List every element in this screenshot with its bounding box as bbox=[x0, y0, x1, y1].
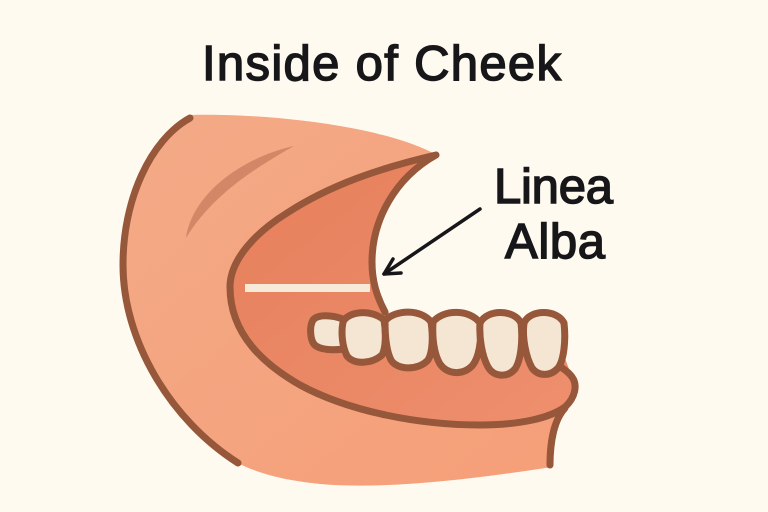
cheek outer skin bbox=[122, 115, 560, 486]
tooth 6 bbox=[523, 312, 565, 374]
tooth 4 bbox=[433, 312, 481, 373]
tooth 2 bbox=[342, 313, 385, 362]
tooth 3 bbox=[385, 312, 432, 368]
label: Linea Alba: Alba bbox=[505, 215, 606, 269]
linea alba white line bbox=[245, 284, 370, 292]
label: Linea Alba bbox=[494, 160, 614, 269]
title: Inside of Cheek bbox=[202, 37, 562, 91]
molar tooth 1 bbox=[311, 316, 344, 350]
inner mouth cavity bbox=[230, 155, 575, 425]
cheek illustration bbox=[122, 115, 575, 486]
arrow pointing to linea alba bbox=[384, 209, 480, 274]
label: Linea Alba: Linea bbox=[494, 160, 614, 214]
jaw lip curve bbox=[550, 408, 565, 465]
inner mouth outline bbox=[230, 155, 575, 425]
teeth bbox=[311, 312, 565, 375]
tooth 5 bbox=[480, 312, 522, 375]
cheek outline bbox=[123, 118, 238, 463]
cheek crease bbox=[186, 146, 294, 238]
